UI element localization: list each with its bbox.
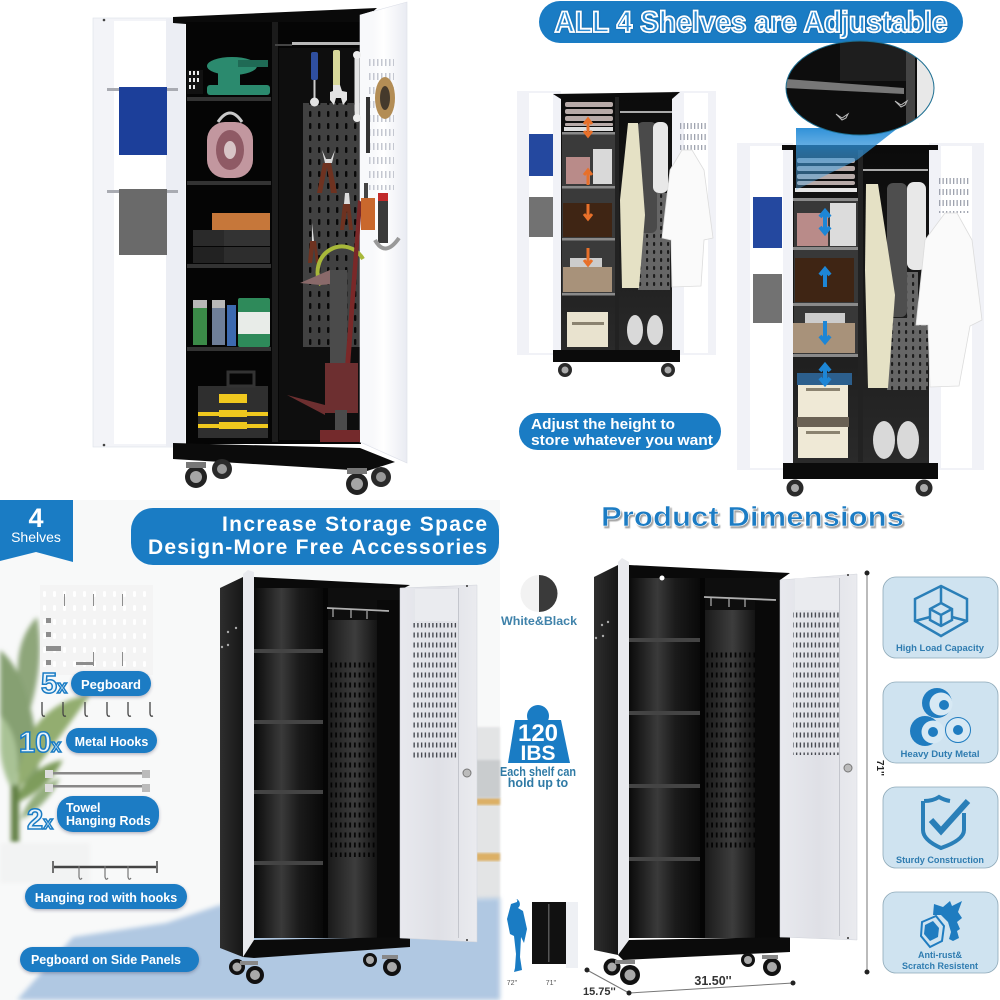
base and casters bbox=[173, 443, 395, 495]
body bbox=[782, 145, 938, 496]
dimension: width 31.50 bbox=[626, 974, 796, 996]
spray cans and bucket bbox=[193, 298, 270, 347]
left door edge bbox=[618, 558, 629, 955]
label: 10x metal hooks: Metal Hooks bbox=[75, 735, 148, 749]
stored items bbox=[563, 102, 663, 347]
colour swatch: white and black: White&Black bbox=[501, 614, 577, 628]
side pegboard patch bbox=[187, 70, 203, 94]
dimension: depth 15.75 bbox=[583, 968, 629, 998]
right door bbox=[780, 574, 857, 940]
organizers bbox=[193, 213, 270, 263]
doors bbox=[517, 91, 716, 355]
icon: towel rods bbox=[45, 770, 150, 792]
label: hanging rod with hooks: Hanging rod with hooks bbox=[35, 891, 177, 905]
hanging rod and tools bbox=[275, 42, 361, 122]
blue arrows bbox=[820, 211, 830, 384]
dimension: width 31.50: 31.50'' bbox=[694, 974, 732, 988]
shelves bbox=[629, 638, 700, 861]
shelves bbox=[562, 132, 615, 296]
cabinet body bbox=[173, 8, 377, 444]
card: high load capacity: High Load Capacity bbox=[896, 643, 985, 654]
right door bbox=[400, 585, 477, 942]
hanging rod bbox=[704, 597, 776, 607]
icon: shield check bbox=[923, 797, 968, 848]
label: 10x metal hooks bbox=[19, 727, 157, 759]
size comparison: person and cabinet: 71'' bbox=[546, 980, 556, 987]
magnifier funnel bbox=[796, 128, 898, 190]
panel: empty cabinet open bbox=[220, 570, 477, 984]
badge: 4 shelves: Shelves bbox=[11, 529, 61, 545]
orange arrows bbox=[584, 119, 592, 265]
card: heavy duty metal: Heavy Duty Metal bbox=[900, 749, 980, 760]
magnifier detail bbox=[786, 41, 937, 135]
size comparison: person and cabinet: 72'' bbox=[507, 980, 517, 987]
label: 5x pegboard: Pegboard bbox=[81, 677, 141, 692]
toolbox bbox=[198, 372, 268, 438]
hanging clothes bbox=[863, 169, 928, 390]
label: 2x towel hanging rods: Towel bbox=[66, 801, 100, 815]
base and casters bbox=[220, 937, 410, 984]
cabinet body bbox=[594, 565, 790, 955]
stored items bbox=[793, 158, 919, 459]
cabinet body bbox=[220, 577, 410, 957]
plant bbox=[0, 617, 90, 843]
title: increase storage space bbox=[131, 508, 499, 565]
shelf pot bbox=[0, 843, 90, 883]
base and casters bbox=[594, 937, 790, 985]
icon: 120 lbs weight bbox=[500, 705, 576, 790]
label: 2x towel hanging rods: Hanging Rods bbox=[66, 814, 151, 828]
door accessories bbox=[361, 77, 399, 249]
card: sturdy construction bbox=[883, 787, 998, 868]
hose bbox=[318, 246, 363, 285]
title: increase storage space: Design-More Free Accessories bbox=[148, 536, 487, 559]
icon: 120 lbs weight: 120 bbox=[518, 720, 558, 747]
dimension: depth 15.75: 15.75'' bbox=[583, 986, 616, 998]
label: hanging rod with hooks bbox=[25, 884, 187, 909]
sander bbox=[207, 57, 270, 95]
towels bbox=[753, 197, 782, 323]
card: high load capacity bbox=[883, 577, 998, 658]
callout: adjust the height: Adjust the height to bbox=[531, 417, 675, 433]
size comparison: person and cabinet bbox=[507, 899, 578, 987]
white robe bbox=[662, 150, 713, 287]
right door bbox=[360, 2, 407, 463]
towels on left door bbox=[107, 87, 178, 255]
hanging rod bbox=[327, 608, 389, 619]
label: 5x pegboard: 5x bbox=[41, 668, 67, 700]
colour swatch: white and black bbox=[501, 575, 577, 628]
badge: 4 shelves bbox=[0, 500, 73, 562]
label: 2x towel hanging rods bbox=[27, 796, 159, 836]
card: heavy duty metal bbox=[883, 682, 998, 763]
title: product dimensions: Product Dimensions bbox=[601, 501, 904, 532]
body bbox=[553, 92, 680, 377]
card: anti-rust and scratch resistant: Anti-rust& bbox=[918, 950, 962, 960]
panel: large cabinet with clothes bbox=[737, 41, 984, 496]
high lift jack bbox=[287, 200, 362, 442]
shelves bbox=[793, 198, 858, 357]
left door bbox=[93, 18, 185, 447]
icon: metal hooks bbox=[42, 702, 153, 716]
title: all shelves adjustable: ALL 4 Shelves are Adjustable bbox=[554, 6, 948, 39]
pegboard bbox=[303, 103, 360, 347]
left door edge bbox=[243, 570, 254, 957]
dimension: height 71: 71'' bbox=[874, 760, 885, 776]
panel: dimensions cabinet bbox=[594, 558, 857, 985]
label: pegboard on side panels: Pegboard on Side Panels bbox=[31, 953, 181, 967]
icon: cube bbox=[915, 586, 967, 636]
icon: 120 lbs weight: Each shelf can bbox=[500, 765, 576, 779]
doors bbox=[737, 143, 984, 470]
callout: adjust the height bbox=[519, 413, 721, 450]
dimension: height 71 bbox=[864, 570, 885, 974]
title: increase storage space: Increase Storage Space bbox=[222, 513, 487, 536]
icon: metal rolls bbox=[910, 688, 970, 746]
badge: 4 shelves: 4 bbox=[28, 503, 44, 533]
icon: hanging rod with hooks bbox=[53, 861, 157, 879]
label: 5x pegboard bbox=[41, 668, 151, 700]
icon: 120 lbs weight: IBS bbox=[520, 742, 556, 765]
icon: splash shield bbox=[921, 901, 962, 947]
cable reel bbox=[207, 113, 253, 178]
shelves bbox=[254, 649, 323, 865]
accessory: pegboard bbox=[40, 585, 153, 675]
towels bbox=[529, 134, 553, 237]
icon: 120 lbs weight: hold up to bbox=[508, 776, 569, 790]
card: anti-rust and scratch resistant bbox=[883, 892, 998, 973]
card: anti-rust and scratch resistant: Scratch Resistent bbox=[902, 961, 978, 971]
label: 10x metal hooks: 10x bbox=[19, 727, 61, 759]
panel: main cabinet with tools bbox=[93, 2, 407, 495]
white robe bbox=[916, 213, 982, 387]
panel: small cabinet with clothes bbox=[517, 91, 716, 377]
callout: adjust the height: store whatever you want bbox=[531, 433, 713, 449]
card: sturdy construction: Sturdy Construction bbox=[896, 855, 984, 866]
pliers bbox=[308, 150, 353, 263]
pegboard bbox=[328, 600, 400, 938]
rug bbox=[17, 898, 500, 1000]
hanging clothes bbox=[620, 111, 672, 290]
shelves bbox=[187, 97, 271, 351]
label: pegboard on side panels bbox=[20, 947, 199, 972]
panel: accessories scene background bbox=[0, 500, 500, 1000]
pegboard bbox=[705, 600, 780, 938]
label: 2x towel hanging rods: 2x bbox=[27, 804, 53, 836]
